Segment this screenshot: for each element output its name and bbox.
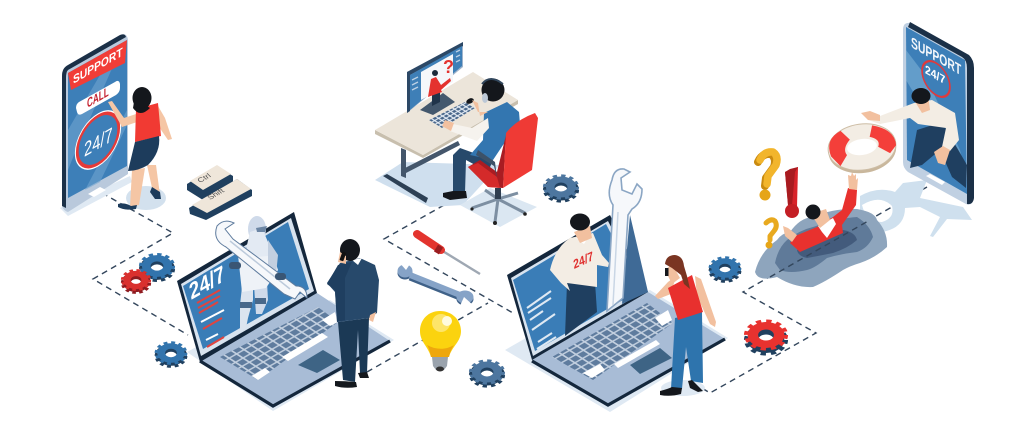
laptop screen	[507, 215, 648, 360]
desk keyboard	[429, 102, 475, 128]
support heading: SUPPORT	[911, 34, 961, 80]
red chair	[468, 113, 538, 188]
icon: exclamation mark	[785, 167, 799, 218]
icon: gear near desk	[545, 176, 577, 201]
call button	[76, 81, 120, 115]
connector: left dashed line	[93, 193, 188, 335]
desk legs	[383, 141, 460, 203]
icon: keyboard keys ctrl and shift: Shift	[205, 187, 227, 201]
connector: middle dashed lines	[367, 200, 513, 372]
panel: right laptop	[505, 169, 728, 412]
monitor	[407, 42, 463, 115]
panel: left phone with woman: SUPPORT	[73, 44, 123, 87]
floor shadows	[375, 162, 500, 207]
connector over puddle	[770, 220, 870, 277]
phone screen	[906, 27, 967, 194]
panel: desk operator	[375, 42, 538, 227]
screen lines	[527, 291, 556, 349]
icon: lifebuoy	[825, 119, 899, 177]
wrench	[216, 221, 307, 299]
mouse	[465, 97, 475, 105]
monitor: ?	[443, 57, 454, 77]
panel: left phone with woman	[60, 34, 172, 216]
home button	[926, 174, 945, 185]
panel: left laptop	[177, 212, 394, 411]
right phone	[861, 22, 974, 204]
screen lines	[197, 290, 224, 347]
phone body	[62, 34, 128, 212]
icon: small blue gear	[157, 343, 185, 366]
woman	[108, 87, 172, 210]
laptop screen	[177, 212, 317, 362]
person: woman on phone	[655, 255, 716, 396]
phone header: support	[68, 40, 127, 90]
trackpad	[298, 350, 340, 373]
panel: drowning scene and right phone	[755, 22, 974, 287]
laptop keyboard	[552, 303, 673, 380]
icon: screwdriver	[417, 234, 480, 274]
trackpad	[630, 348, 672, 374]
panel: left phone with woman: CALL	[87, 83, 109, 111]
laptop keyboard	[220, 307, 338, 380]
laptop base	[532, 292, 725, 407]
icon: small wrench	[398, 261, 474, 308]
operator	[442, 78, 520, 200]
chair base	[470, 188, 527, 225]
phone shadow on floor	[860, 180, 972, 237]
icon: keyboard keys ctrl and shift	[187, 165, 252, 220]
icon: blue gear near woman	[711, 258, 739, 281]
icon: keyboard keys ctrl and shift: Ctrl	[195, 172, 213, 184]
home button	[88, 187, 106, 197]
swimmer	[783, 172, 858, 252]
laptop shadow	[505, 290, 728, 412]
puddle	[755, 209, 887, 287]
icon: blue gear	[141, 255, 173, 280]
phone screen	[68, 40, 127, 198]
24/7 text: 24/7	[187, 260, 227, 305]
desk top	[375, 100, 518, 158]
phone man	[861, 88, 967, 188]
icon: question mark small	[766, 220, 776, 248]
laptop base	[200, 293, 390, 408]
icon: question mark large	[758, 152, 777, 200]
icon: gear bottom center	[471, 361, 503, 386]
24/7 badge	[75, 101, 121, 179]
person: man in suit on phone	[327, 239, 379, 388]
phone shadow	[60, 176, 132, 216]
panel: left phone with woman: 24/7	[84, 124, 113, 162]
right phone: 24/7	[925, 63, 945, 88]
large wrench	[607, 169, 648, 311]
icon: red gear lower right	[747, 321, 785, 354]
support man 24/7	[550, 214, 630, 336]
icon: red gear	[123, 270, 149, 293]
laptop shadow	[187, 300, 394, 411]
robot	[238, 216, 278, 332]
connector: right dashed line	[697, 187, 927, 393]
icon: light bulb	[420, 311, 461, 372]
support man 24/7: 24/7	[572, 249, 594, 272]
24/7 circle	[922, 55, 950, 103]
